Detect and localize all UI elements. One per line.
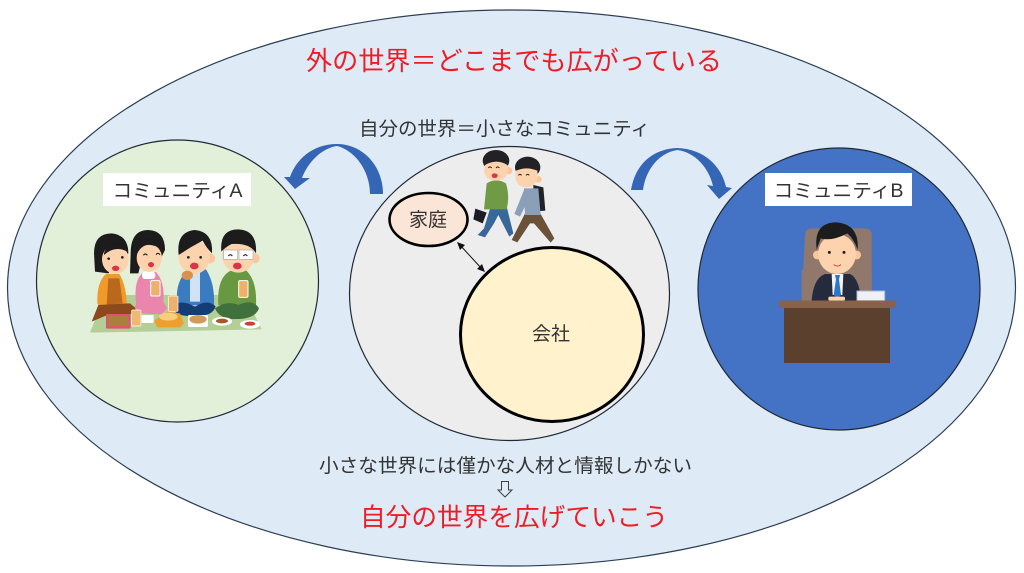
node: family: [390, 193, 468, 246]
call to action: 自分の世界を広げていこう: [360, 504, 668, 532]
person 1: [97, 274, 127, 308]
arrow: to community A: [284, 144, 383, 194]
panel: community A: [36, 140, 318, 422]
person 2: [135, 272, 167, 314]
panel: own world circle: [350, 146, 670, 440]
label: community A: [103, 173, 251, 206]
icon: down arrow: [498, 482, 512, 497]
label: community A: コミュニティA: [112, 181, 243, 202]
illustration: two men walking: [473, 150, 554, 243]
label: community B: [765, 173, 912, 206]
food: [106, 314, 131, 329]
text: small world note: 小さな世界には僅かな人材と情報しかない: [319, 455, 692, 477]
illustration: executive at desk: [779, 222, 895, 363]
node: family: 家庭: [409, 209, 447, 231]
person 4: [218, 269, 256, 305]
arrow: to community B: [631, 148, 732, 199]
illustration: four people picnicking: [90, 229, 262, 333]
node: company: [460, 248, 644, 422]
title: 外の世界＝どこまでも広がっている: [306, 46, 722, 76]
label: community B: コミュニティB: [774, 181, 904, 202]
subtitle: own world: 自分の世界＝小さなコミュニティ: [359, 118, 650, 140]
node: company: 会社: [532, 323, 570, 345]
arrow: family to company: [457, 242, 485, 272]
panel: community B: [698, 148, 980, 430]
person 3: [177, 269, 214, 305]
